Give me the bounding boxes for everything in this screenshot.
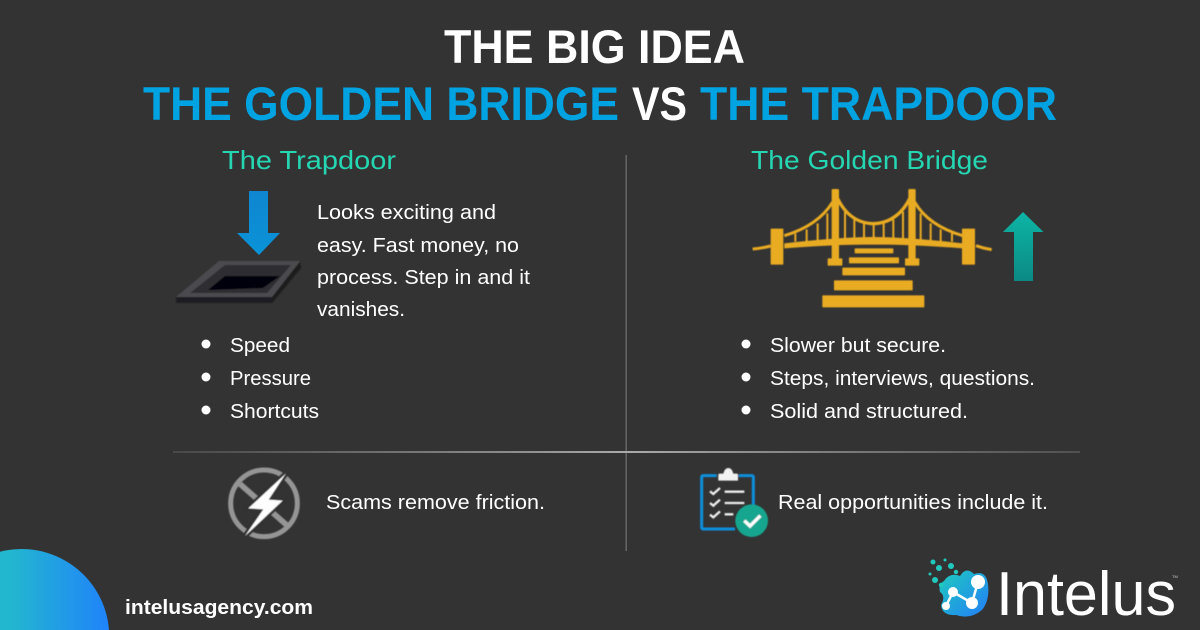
title line: Golden Bridge vs Trapdoor: THE GOLDEN BRIDGE: [143, 77, 619, 130]
title line: Golden Bridge vs Trapdoor: VS: [632, 77, 687, 130]
decorative gradient circle: [0, 549, 109, 630]
footer website: intelusagency.com: [125, 597, 313, 619]
title line: Golden Bridge vs Trapdoor: [143, 77, 1057, 130]
title line: Golden Bridge vs Trapdoor: THE TRAPDOOR: [700, 77, 1057, 130]
title: [143, 20, 1057, 130]
callout: real opportunities: [702, 468, 1048, 537]
logo: Intelus: [928, 558, 1178, 629]
logo wordmark: Intelus: [996, 560, 1176, 629]
bullet list: [202, 335, 319, 423]
description text: process. Step in and it: [317, 267, 530, 289]
text: scams remove friction: Scams remove friction.: [326, 492, 545, 514]
trademark: TM: [1172, 574, 1178, 579]
text: real opportunities: Real opportunities include it.: [778, 492, 1048, 514]
callout: scams remove friction: [231, 470, 545, 537]
bullet list: Slower but secure.: [770, 335, 946, 357]
heading: The Trapdoor: The Trapdoor: [222, 145, 396, 175]
panel: the golden bridge: [742, 145, 1044, 423]
panel: the trapdoor: [176, 145, 530, 423]
horizontal divider: [173, 451, 1080, 453]
icon: trapdoor: [176, 261, 301, 303]
icon: up arrow: [1003, 212, 1044, 281]
description text: [317, 202, 530, 321]
description text: easy. Fast money, no: [317, 235, 519, 257]
logo mark: [928, 558, 988, 617]
vertical divider: [626, 155, 627, 551]
description text: Looks exciting and: [317, 202, 496, 224]
bullet list: Steps, interviews, questions.: [770, 368, 1035, 390]
bullet list: Solid and structured.: [770, 401, 968, 423]
bullet list: Pressure: [230, 368, 311, 390]
icon: down arrow: [237, 191, 280, 255]
icon: golden bridge: [753, 189, 992, 307]
bullet list: Shortcuts: [230, 401, 319, 423]
bullet list: Speed: [230, 335, 290, 357]
description text: vanishes.: [317, 299, 405, 321]
heading: The Golden Bridge: The Golden Bridge: [751, 145, 988, 175]
icon: no lightning: [231, 470, 297, 537]
bullet list: [742, 335, 1035, 423]
icon: checklist clipboard: [702, 468, 768, 537]
title line: The Big Idea: THE BIG IDEA: [444, 20, 745, 73]
